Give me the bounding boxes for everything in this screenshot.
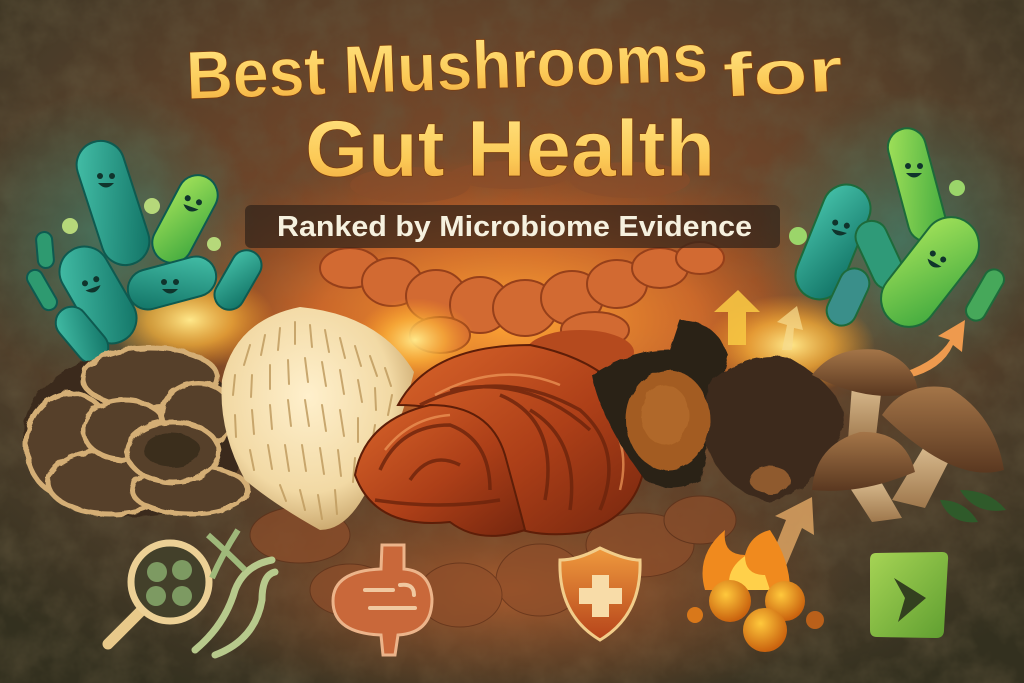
mushroom: chaga [592, 320, 845, 502]
glow bursts [105, 270, 875, 395]
icon: shield with plus [560, 548, 640, 640]
growth arrows [714, 290, 965, 566]
title: for [721, 36, 845, 111]
title [185, 20, 845, 193]
mushroom: lion's mane [221, 307, 414, 530]
subtitle banner: Ranked by Microbiome Evidence [277, 211, 752, 243]
left bacteria group [24, 135, 267, 370]
icon: flaming spheres [687, 530, 824, 652]
icon: intestine [333, 545, 432, 655]
title: Gut Health [305, 104, 715, 193]
icon: magnifier and DNA [108, 530, 275, 655]
mushroom: turkey tail [23, 348, 248, 517]
icon: green square with play arrow [870, 552, 948, 638]
right bacteria group [788, 124, 1008, 338]
mushroom: reishi [355, 330, 645, 536]
title: Best Mushrooms [185, 20, 709, 114]
intestines backdrop [250, 161, 736, 627]
mushroom: shiitake cluster [812, 349, 1006, 522]
subtitle banner [245, 205, 780, 248]
